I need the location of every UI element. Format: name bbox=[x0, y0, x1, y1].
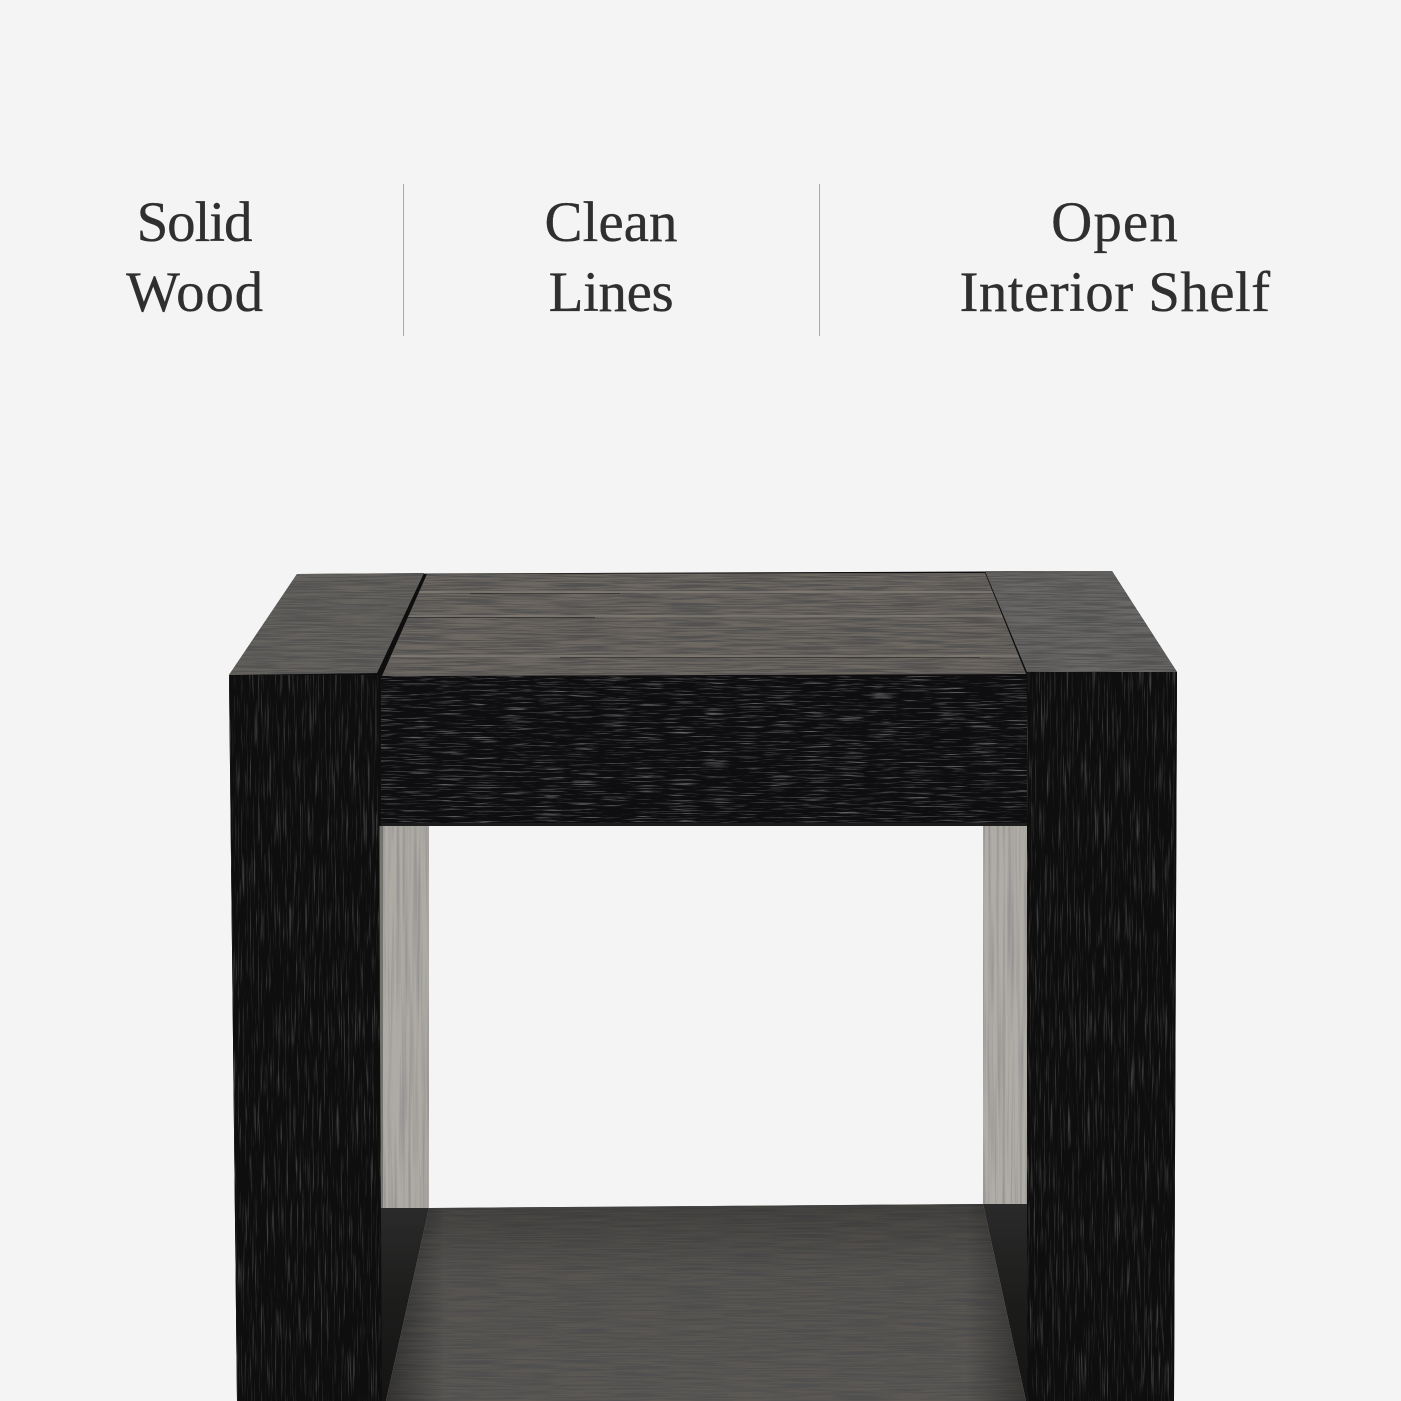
feature label: solid wood bbox=[126, 191, 264, 324]
right leg front bbox=[1027, 672, 1177, 1401]
feature label: clean lines: Clean bbox=[545, 191, 677, 254]
inner light left panel bbox=[379, 826, 429, 1208]
top surface of right leg bbox=[985, 571, 1178, 673]
feature label: solid wood: Solid bbox=[137, 191, 251, 254]
table silhouette backing bbox=[229, 571, 1177, 1401]
divider bbox=[819, 184, 820, 336]
product illustration: black wood side table bbox=[229, 571, 1177, 1401]
lower shelf bbox=[380, 1204, 1030, 1401]
top surface of left leg bbox=[228, 573, 428, 676]
feature label: open interior shelf bbox=[959, 191, 1271, 324]
feature label: clean lines: Lines bbox=[549, 261, 673, 324]
inner light right panel bbox=[983, 826, 1028, 1204]
feature label: solid wood: Wood bbox=[126, 261, 264, 324]
feature label: clean lines bbox=[545, 191, 677, 324]
top front apron bbox=[381, 676, 1028, 826]
divider bbox=[403, 184, 404, 336]
left leg front bbox=[228, 675, 383, 1401]
feature label: open interior shelf: Interior Shelf bbox=[959, 261, 1271, 324]
table top surface bbox=[380, 573, 1030, 677]
feature label: open interior shelf: Open bbox=[1051, 191, 1179, 254]
